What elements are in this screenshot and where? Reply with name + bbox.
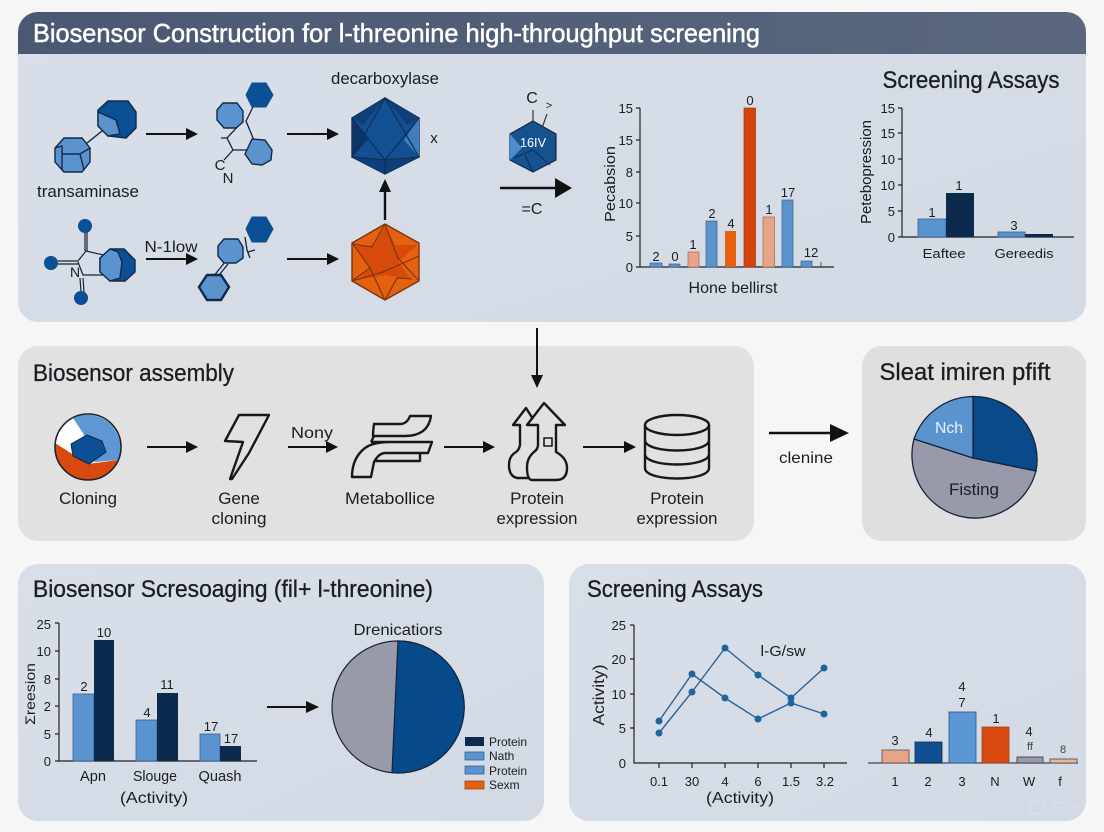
- arrow: [146, 128, 198, 140]
- line chart: activity: 6: [754, 774, 762, 789]
- pie chart: Fisting: [949, 480, 999, 499]
- line chart: activity: 5: [619, 721, 626, 736]
- arrow: [267, 701, 319, 713]
- arrow: [583, 441, 636, 453]
- bar chart: activity: Slouge: [133, 768, 177, 785]
- bar chart: activity: 10: [37, 644, 51, 659]
- bar chart: top centre: 2: [708, 206, 716, 221]
- molecule: transaminase substrate: [55, 101, 136, 172]
- icon: blue enzyme: [352, 98, 419, 174]
- bar chart: top right: 15: [881, 126, 895, 141]
- icon: orange enzyme: [352, 224, 419, 300]
- bar chart: activity: 8: [44, 672, 51, 687]
- bar chart: activity: 4: [143, 705, 151, 720]
- legend: [465, 735, 527, 792]
- text: gene cloning: Gene: [218, 489, 260, 508]
- arrow: up: [379, 179, 391, 220]
- bar chart: categories: N: [990, 774, 1000, 789]
- bar chart: categories: 1: [891, 774, 899, 789]
- bar chart: activity: 2: [80, 679, 88, 694]
- bar chart: categories: 4: [925, 725, 933, 740]
- arrow with label: [288, 425, 338, 453]
- bar chart: top centre: 2: [652, 249, 660, 264]
- molecule: intermediate top: [215, 83, 273, 187]
- bar chart: top right: Gereedis: [994, 246, 1054, 261]
- bar chart: top right: 5: [888, 204, 895, 219]
- icon: small enzyme with labels: [510, 90, 556, 172]
- bar chart: activity: 0: [44, 754, 51, 769]
- arrow: down connector: [531, 328, 543, 388]
- legend: Nath: [489, 749, 514, 763]
- arrow: [444, 441, 495, 453]
- arrow with label: clenine: clenine: [779, 450, 833, 467]
- panel: biosensor screening: [18, 564, 544, 821]
- bar chart: top centre: 1: [765, 202, 773, 217]
- panel: sleat pie: [862, 346, 1086, 541]
- bar chart: activity: Quash: [198, 768, 242, 785]
- icon: cloning pie: [55, 414, 121, 480]
- arrow: [287, 128, 339, 140]
- text: protein expression: [496, 489, 578, 528]
- heading: biosensor assembly: Biosensor assembly: [33, 360, 234, 387]
- bar chart: top centre: 1: [689, 237, 697, 252]
- line chart: activity: 0.1: [650, 774, 668, 789]
- line chart: activity: [591, 618, 847, 807]
- pie chart: split: [332, 641, 464, 773]
- line chart: activity: 30: [685, 774, 699, 789]
- line chart: activity: 20: [612, 652, 626, 667]
- bar chart: top centre: 0: [626, 260, 633, 275]
- bar chart: categories: 7: [958, 695, 966, 710]
- bar chart: activity: (Activity): [120, 790, 188, 807]
- line chart: activity: 25: [612, 618, 626, 633]
- bar chart: top centre: Hone bellirst: [688, 280, 778, 297]
- bar chart: activity: 10: [97, 625, 111, 640]
- bar chart: top right: 0: [888, 230, 895, 245]
- arrow with label: clenine: [769, 424, 849, 467]
- bar chart: activity: 17: [204, 719, 218, 734]
- icon: protein flasks: [509, 403, 567, 480]
- line chart: activity: 1.5: [782, 774, 800, 789]
- bar chart: activity: Σreesion: [22, 663, 38, 725]
- bar chart: top centre: 12: [804, 245, 818, 260]
- bar chart: activity: 5: [44, 727, 51, 742]
- bar chart: top right: 3: [1010, 218, 1018, 233]
- arrow with label: [144, 239, 198, 265]
- panel: pathway and charts: [18, 12, 1086, 322]
- text: protein expression: expression: [636, 509, 718, 528]
- line chart: activity: 10: [612, 687, 626, 702]
- line chart: activity: 4: [721, 774, 729, 789]
- icon: small enzyme with labels: 16IV: [520, 135, 546, 150]
- heading: Biosensor Scresoaging (fil+ l-threonine): [33, 576, 433, 603]
- bar chart: top centre: 0: [746, 93, 754, 108]
- arrow with label: N-1low: [144, 239, 198, 256]
- bar chart: top centre: 8: [626, 165, 633, 180]
- molecule: substrate bottom: [44, 219, 135, 305]
- icon: metabolite: [352, 416, 432, 477]
- bar chart: categories: W: [1023, 774, 1036, 789]
- bar chart: categories: ff: [1027, 741, 1034, 753]
- bar chart: top right: 1: [955, 178, 963, 193]
- bar chart: activity: 25: [37, 617, 51, 632]
- text: protein expression: [636, 489, 718, 528]
- arrow with label: [500, 178, 572, 218]
- bar chart: top right: 10: [881, 178, 895, 193]
- text: gene cloning: [212, 489, 266, 528]
- bar chart: categories: 8: [1060, 744, 1066, 756]
- line chart: activity: (Activity): [706, 790, 774, 807]
- bar chart: top centre: 17: [781, 185, 795, 200]
- text: decarboxylase: decarboxylase: [331, 69, 439, 88]
- line chart: activity: l-G/sw: [760, 643, 806, 660]
- title bar: Biosensor Construction for l-threonine high-throughput screening: [33, 18, 760, 48]
- bar chart: activity: [22, 617, 257, 807]
- legend: Sexm: [489, 778, 520, 792]
- bar chart: top right: 15: [881, 101, 895, 116]
- bar chart: categories: [868, 679, 1078, 789]
- bar chart: top right: Eaftee: [922, 246, 966, 261]
- bar chart: top centre: 15: [619, 133, 633, 148]
- molecule: intermediate bottom: [199, 217, 273, 300]
- legend: Protein: [489, 735, 527, 749]
- bar chart: categories: f: [1058, 774, 1062, 789]
- text: cloning: Cloning: [59, 489, 117, 508]
- bar chart: top centre: 0: [671, 249, 679, 264]
- text: x: x: [430, 130, 438, 147]
- bar chart: top right: [858, 101, 1074, 261]
- bar chart: categories: 3: [958, 774, 966, 789]
- legend: Protein: [489, 764, 527, 778]
- bar chart: top centre: [602, 93, 834, 297]
- line chart: activity: 0: [619, 756, 626, 771]
- arrow: [147, 441, 198, 453]
- arrow: [287, 253, 339, 265]
- text: transaminase: transaminase: [37, 182, 139, 201]
- bar chart: categories: 1: [992, 711, 1000, 726]
- bar chart: categories: 3: [891, 733, 899, 748]
- icon: small enzyme with labels: C: [526, 90, 538, 107]
- bar chart: top centre: Pecabsion: [602, 146, 619, 222]
- bar chart: top right: Petebopression: [858, 120, 875, 224]
- molecule: intermediate top: C: [215, 157, 226, 174]
- bar chart: top right: 10: [881, 152, 895, 167]
- icon: database: [645, 415, 709, 478]
- text: protein expression: Protein: [650, 489, 704, 508]
- bar chart: top centre: 10: [619, 196, 633, 211]
- bar chart: top centre: 4: [727, 216, 735, 231]
- text: protein expression: Protein: [510, 489, 564, 508]
- molecule: intermediate top: N: [223, 170, 233, 187]
- bar chart: categories: 4: [1025, 724, 1033, 739]
- pie chart: Nch: [935, 420, 963, 437]
- text: gene cloning: cloning: [212, 509, 266, 528]
- bar chart: activity: 11: [160, 677, 174, 692]
- arrow with label: =C: [522, 201, 542, 218]
- watermark: [1030, 800, 1080, 817]
- pie chart: [912, 396, 1037, 518]
- bar chart: activity: 2: [44, 699, 51, 714]
- heading: screening assays top: Screening Assays: [882, 67, 1060, 94]
- heading: Screening Assays: [587, 576, 763, 603]
- panel: screening assays bottom: [569, 564, 1086, 821]
- bar chart: top right: 1: [928, 205, 936, 220]
- molecule: substrate bottom: N: [70, 264, 80, 280]
- panel: biosensor assembly: [18, 346, 754, 541]
- bar chart: activity: Apn: [80, 768, 106, 785]
- bar chart: top centre: 5: [626, 229, 633, 244]
- bar chart: top centre: 15: [619, 101, 633, 116]
- heading: Sleat imiren pfift: [880, 359, 1051, 386]
- icon: small enzyme with labels: >: [546, 100, 552, 112]
- line chart: activity: Activity): [591, 664, 608, 726]
- bar chart: categories: 4: [958, 679, 966, 694]
- watermark: Gro: [1053, 800, 1080, 817]
- icon: lightning: [225, 415, 269, 479]
- text: metabolite: Metabollice: [345, 489, 435, 508]
- bar chart: categories: 2: [924, 774, 932, 789]
- bar chart: activity: 17: [224, 731, 238, 746]
- line chart: activity: 3.2: [816, 774, 834, 789]
- arrow with label: Nony: [291, 425, 333, 442]
- heading: pie: Drenicatiors: [354, 622, 442, 639]
- title bar: [18, 12, 1086, 54]
- text: protein expression: expression: [496, 509, 578, 528]
